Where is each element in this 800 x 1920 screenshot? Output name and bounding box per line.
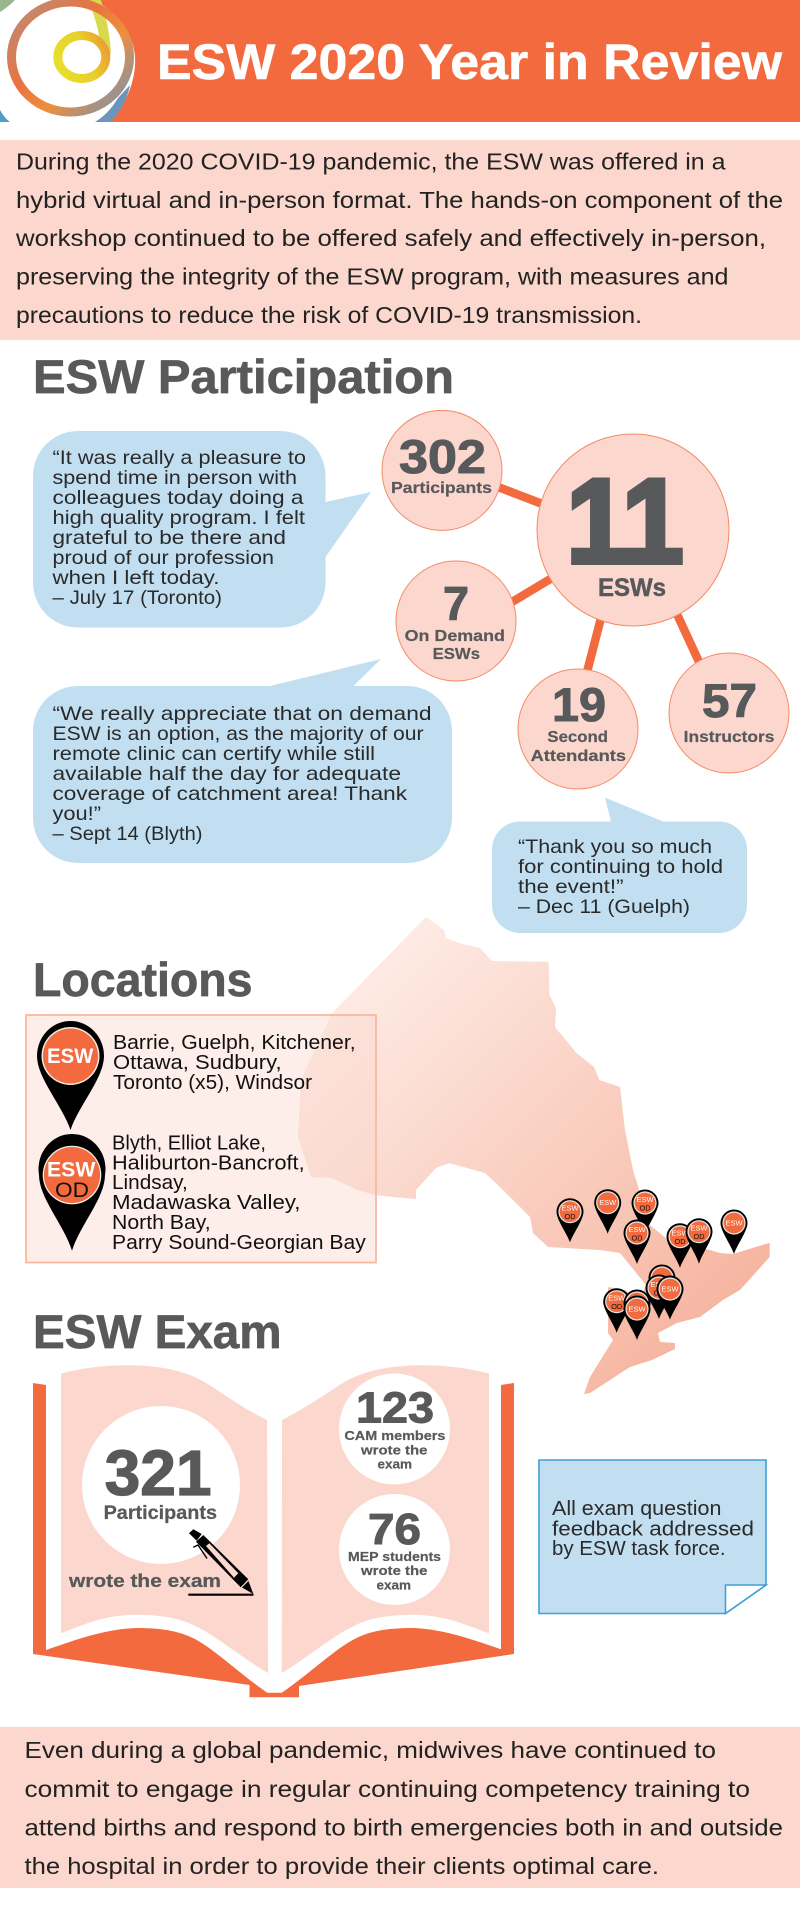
stat: 76 MEP students xyxy=(339,1494,450,1605)
icon: ESW pin: ESW xyxy=(47,1045,94,1068)
pin: on demand 9: ESW xyxy=(650,1280,668,1289)
pin: on demand 9 xyxy=(646,1274,672,1319)
sticky note: All exam question xyxy=(552,1498,721,1520)
legend box xyxy=(26,1015,376,1262)
sticky note xyxy=(539,1460,766,1614)
connector lines xyxy=(498,487,700,672)
stat circle: 7 on demand ESWs xyxy=(396,561,516,681)
icon: logo rings xyxy=(0,0,135,122)
stat: 76 MEP students: MEP students xyxy=(348,1550,441,1564)
quote bubble: Sept 14 Blyth: ESW is an option, as the majority of our xyxy=(52,723,424,745)
pin: on demand 9: OD xyxy=(654,1288,665,1298)
text: ESW locations: Barrie, Guelph, Kitchener, xyxy=(113,1032,356,1054)
intro text panel: preserving the integrity of the ESW program, with measures and xyxy=(16,264,728,290)
pin: on demand 4: ESW xyxy=(628,1225,646,1234)
stat: 76 MEP students: 76 xyxy=(368,1505,421,1554)
stat circle: 7 on demand ESWs: On Demand xyxy=(405,628,505,645)
stat circle: 7 on demand ESWs: ESWs xyxy=(433,646,480,663)
icon: ESW OD pin: OD xyxy=(55,1179,89,1202)
closing text panel xyxy=(0,1727,800,1888)
quote bubble: Dec 11 Guelph: “Thank you so much xyxy=(518,836,712,858)
quote bubble: Dec 11 Guelph xyxy=(492,798,747,933)
pin: on demand 6: OD xyxy=(694,1232,705,1241)
pin: on demand 3 xyxy=(632,1190,658,1234)
text: on demand locations: Haliburton-Bancroft, xyxy=(112,1152,305,1174)
stat circle: 19 second attendants xyxy=(518,669,638,789)
stat: 321 participants: Participants xyxy=(104,1502,217,1524)
pin: on demand 5 xyxy=(666,1223,694,1268)
stat circle: 11 ESWs xyxy=(537,434,729,626)
header banner xyxy=(0,0,800,122)
icon: ESW OD pin xyxy=(39,1134,106,1251)
pin: ESW 10: ESW xyxy=(662,1284,679,1294)
stat: 321 participants xyxy=(68,1406,240,1591)
stat circle: 57 instructors: Instructors xyxy=(684,729,775,746)
stat circle: 302 participants: 302 xyxy=(399,430,486,483)
closing text panel: the hospital in order to provide their clients optimal care. xyxy=(24,1853,659,1879)
pin: on demand 5: OD xyxy=(674,1237,686,1246)
stat circle: 7 on demand ESWs: 7 xyxy=(443,577,469,630)
stat circle: 19 second attendants: Second xyxy=(547,729,608,746)
sticky note: feedback addressed xyxy=(552,1518,754,1540)
stat: 76 MEP students: wrote the xyxy=(360,1564,428,1578)
pin: ESW 2 xyxy=(594,1189,621,1234)
icon: ESW OD pin: ESW xyxy=(47,1159,96,1182)
quote bubble: Sept 14 Blyth: coverage of catchment area! Thank xyxy=(52,783,407,805)
text: on demand locations: Madawaska Valley, xyxy=(112,1192,300,1214)
text: on demand locations: North Bay, xyxy=(112,1212,211,1234)
sticky note: by ESW task force. xyxy=(552,1538,726,1560)
pin: on demand 11: ESW xyxy=(608,1294,626,1303)
stat: 321 participants: 321 xyxy=(105,1437,212,1509)
quote bubble: Sept 14 Blyth: “We really appreciate that on demand xyxy=(52,703,432,725)
pin: ESW 13 xyxy=(624,1296,650,1340)
pin: on demand 4: OD xyxy=(632,1234,643,1242)
quote bubble: Dec 11 Guelph: the event!” xyxy=(518,876,624,898)
quote bubble: Sept 14 Blyth: remote clinic can certify while still xyxy=(52,743,375,765)
pin: ESW 7: ESW xyxy=(726,1218,743,1228)
map of Ontario xyxy=(298,917,770,1394)
text: ESW locations xyxy=(113,1032,356,1094)
pin: on demand 6 xyxy=(686,1218,712,1264)
quote bubble: July 17 Toronto: when I left today. xyxy=(51,567,219,589)
pin: ESW 8 xyxy=(648,1264,676,1309)
pin: on demand 11 xyxy=(603,1288,630,1333)
stat circle: 11 ESWs: 11 xyxy=(566,454,684,588)
text: ESW locations: Toronto (x5), Windsor xyxy=(113,1072,312,1094)
text: ESW locations: Ottawa, Sudbury, xyxy=(113,1052,282,1074)
closing text panel: Even during a global pandemic, midwives have continued to xyxy=(24,1737,716,1763)
stat circle: 57 instructors xyxy=(669,653,789,773)
quote bubble: Sept 14 Blyth: available half the day for adequate xyxy=(52,763,401,785)
heading: ESW Participation: ESW Participation xyxy=(33,350,454,403)
closing text panel: commit to engage in regular continuing competency training to xyxy=(24,1776,750,1802)
pin: on demand 1: OD xyxy=(564,1212,576,1221)
heading: ESW Exam: ESW Exam xyxy=(33,1305,282,1358)
pin: ESW 10 xyxy=(656,1276,684,1320)
quote bubble: July 17 Toronto: – July 17 (Toronto) xyxy=(52,587,222,609)
pin: on demand 5: ESW xyxy=(672,1229,689,1238)
stat: 123 CAM members: exam xyxy=(378,1458,412,1472)
intro text panel: workshop continued to be offered safely and effectively in-person, xyxy=(15,225,766,251)
stat: 123 CAM members xyxy=(339,1374,450,1484)
stat: 76 MEP students: exam xyxy=(376,1578,411,1592)
quote bubble: Dec 11 Guelph: – Dec 11 (Guelph) xyxy=(518,896,690,918)
stat circle: 302 participants xyxy=(382,410,502,530)
stat circle: 19 second attendants: Attendants xyxy=(531,748,626,765)
left page xyxy=(61,1365,268,1673)
pin: on demand 3: OD xyxy=(640,1204,651,1212)
intro text panel xyxy=(0,140,800,340)
stat: 123 CAM members: 123 xyxy=(356,1384,434,1433)
icon: pen xyxy=(188,1529,254,1595)
pin: on demand 6: ESW xyxy=(690,1224,708,1233)
text: on demand locations xyxy=(112,1132,366,1254)
right page xyxy=(282,1365,489,1673)
quote bubble: Dec 11 Guelph: for continuing to hold xyxy=(518,856,723,878)
quote bubble: Sept 14 Blyth: you!” xyxy=(52,803,101,825)
stat circle: 302 participants: Participants xyxy=(391,480,492,497)
pin: ESW 13: ESW xyxy=(628,1304,646,1314)
open book xyxy=(33,1365,514,1697)
stat circle: 57 instructors: 57 xyxy=(702,674,757,727)
pin: on demand 1 xyxy=(556,1198,584,1242)
stat: 321 participants: wrote the exam xyxy=(68,1571,221,1591)
quote bubble: July 17 Toronto: grateful to be there and xyxy=(52,527,286,549)
quote bubble: July 17 Toronto: proud of our profession xyxy=(52,547,274,569)
text: on demand locations: Lindsay, xyxy=(112,1172,188,1194)
quote bubble: Sept 14 Blyth xyxy=(33,659,452,863)
intro text panel: precautions to reduce the risk of COVID-19 transmission. xyxy=(16,302,642,328)
heading: Locations: Locations xyxy=(33,953,252,1006)
stat circle: 11 ESWs: ESWs xyxy=(598,574,666,602)
pin: on demand 3: ESW xyxy=(636,1195,654,1204)
title: ESW 2020 Year in Review xyxy=(157,34,782,90)
pin: on demand 4 xyxy=(624,1220,650,1264)
quote bubble: Sept 14 Blyth: – Sept 14 (Blyth) xyxy=(52,823,202,845)
pin: ESW 2: ESW xyxy=(599,1198,617,1207)
quote bubble: July 17 Toronto: colleagues today doing a xyxy=(52,487,304,509)
stat: 123 CAM members: wrote the xyxy=(360,1443,428,1457)
quote bubble: July 17 Toronto: high quality program. I felt xyxy=(52,507,306,529)
text: on demand locations: Parry Sound-Georgian Bay xyxy=(112,1232,366,1254)
stat: 123 CAM members: CAM members xyxy=(344,1429,445,1443)
closing text panel: attend births and respond to birth emergencies both in and outside xyxy=(24,1814,783,1840)
intro text panel: hybrid virtual and in-person format. The hands-on component of the xyxy=(16,187,783,213)
stat circle: 19 second attendants: 19 xyxy=(552,678,606,731)
quote bubble: July 17 Toronto: “It was really a pleasure to xyxy=(52,447,306,469)
text: on demand locations: Blyth, Elliot Lake, xyxy=(112,1132,266,1154)
icon: ESW pin xyxy=(37,1021,104,1130)
intro text panel: During the 2020 COVID-19 pandemic, the ESW was offered in a xyxy=(16,148,726,174)
pin: on demand 11: OD xyxy=(611,1302,623,1311)
pin: ESW 12 xyxy=(624,1290,650,1334)
map pins xyxy=(556,1189,748,1340)
quote bubble: July 17 Toronto xyxy=(33,431,371,628)
pin: on demand 1: ESW xyxy=(562,1204,579,1213)
pin: ESW 7 xyxy=(720,1210,748,1254)
quote bubble: July 17 Toronto: spend time in person with xyxy=(52,467,297,489)
